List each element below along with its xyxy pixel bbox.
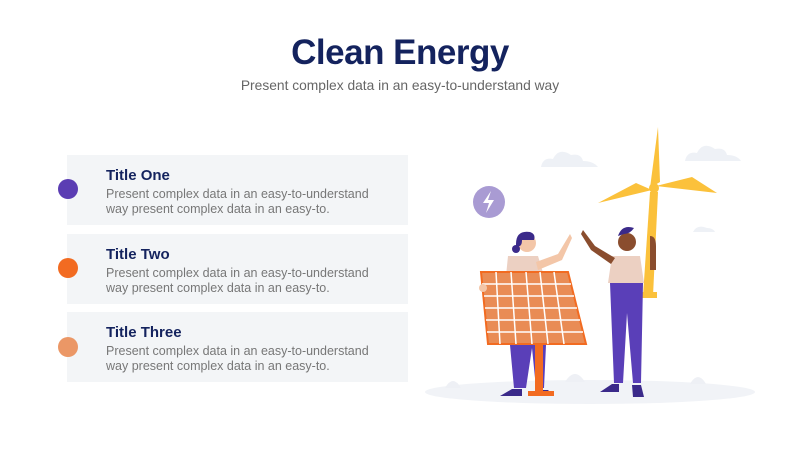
dot: light orange [58, 337, 78, 357]
panel: title three: Title Three [106, 324, 182, 341]
panel: title one: Title One [106, 167, 170, 184]
icon: lightning [473, 186, 505, 218]
panel: title two [67, 234, 408, 304]
title: Clean Energy [291, 33, 509, 72]
clouds [541, 146, 741, 232]
wind turbine [598, 127, 717, 298]
man [581, 227, 656, 397]
dot: orange [58, 258, 78, 278]
panel: title two: Title Two [106, 246, 170, 263]
panel: title one [67, 155, 408, 225]
woman [500, 232, 572, 396]
panel: title three: Present complex data in an easy-to-understand way present complex data in an easy-to. [106, 344, 369, 373]
panel: title two: Present complex data in an easy-to-understand way present complex data in an easy-to. [106, 266, 369, 295]
ground [425, 374, 755, 404]
solar panel [479, 272, 586, 396]
dot: purple [58, 179, 78, 199]
panel: title one: Present complex data in an easy-to-understand way present complex data in an easy-to. [106, 187, 369, 216]
panel: title three [67, 312, 408, 382]
subtitle: Present complex data in an easy-to-understand way [241, 78, 559, 93]
